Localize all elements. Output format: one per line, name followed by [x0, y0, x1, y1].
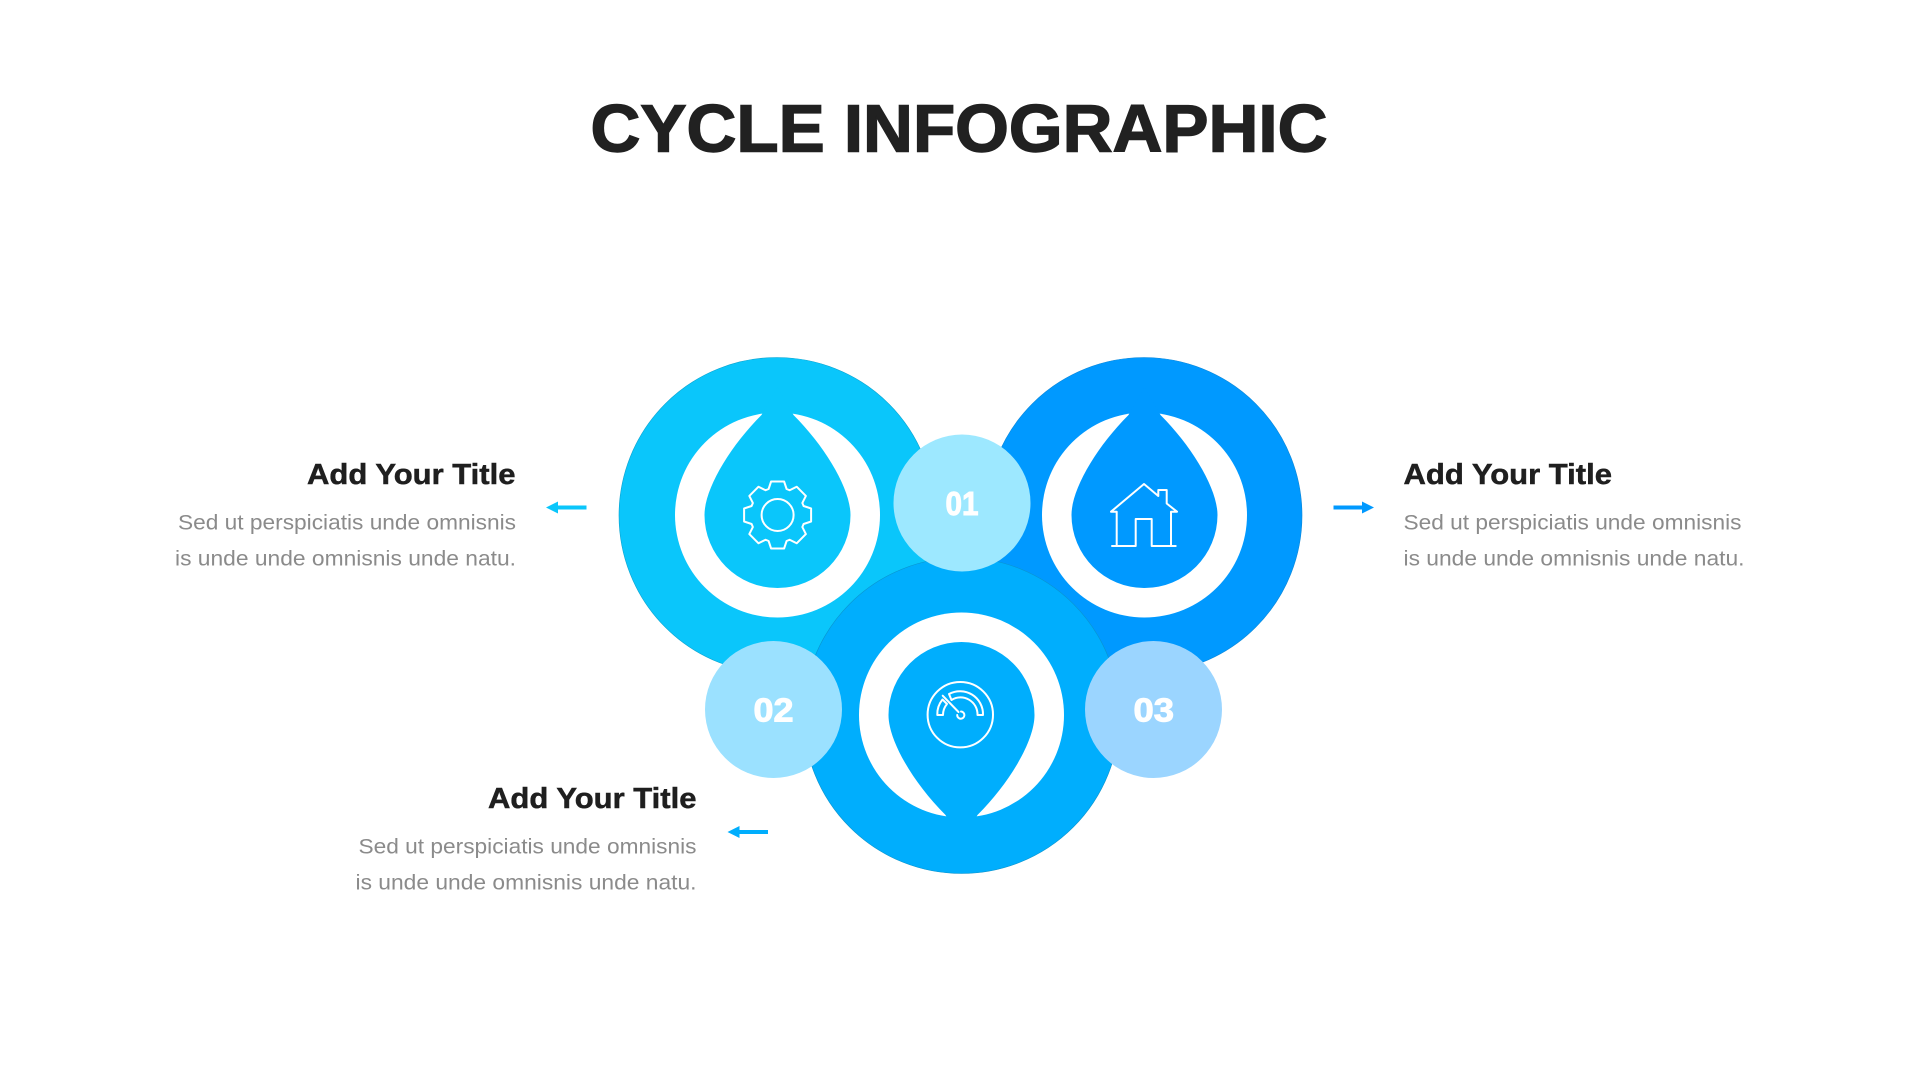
text block: left: Add Your Title [307, 459, 516, 491]
arrow: left [546, 502, 586, 514]
text block: right [1404, 459, 1744, 570]
icon: gauge [928, 682, 993, 747]
circle: step 2 gauge [804, 558, 1120, 874]
badge: 02 [705, 641, 842, 778]
icon: gear [744, 482, 811, 548]
circle: step 1 gear [619, 358, 935, 674]
badge: 01: 01 [946, 485, 978, 522]
text block: left: Sed ut perspiciatis unde omnisnis [178, 510, 516, 534]
badge: 02: 02 [754, 692, 794, 728]
text block: bottom left: is unde unde omnisnis unde natu. [356, 870, 696, 894]
text block: bottom left: Add Your Title [488, 783, 696, 815]
badge: 03 [1085, 641, 1222, 778]
text block: right: Sed ut perspiciatis unde omnisnis [1404, 510, 1742, 534]
circle: step 3 house [986, 358, 1302, 674]
text block: bottom left [356, 783, 696, 894]
text block: left: is unde unde omnisnis unde natu. [175, 546, 516, 570]
icon: house [1111, 484, 1177, 546]
badge: 03: 03 [1134, 692, 1174, 728]
panel: cycle diagram [619, 358, 1302, 874]
arrow: bottom left [728, 826, 768, 838]
title: CYCLE INFOGRAPHIC [590, 92, 1328, 166]
text block: right: is unde unde omnisnis unde natu. [1404, 546, 1744, 570]
text block: right: Add Your Title [1404, 459, 1612, 491]
arrow: right [1334, 502, 1374, 514]
text block: bottom left: Sed ut perspiciatis unde omnisnis [358, 834, 696, 858]
badge: 01 [894, 434, 1030, 572]
text block: left [175, 459, 516, 570]
